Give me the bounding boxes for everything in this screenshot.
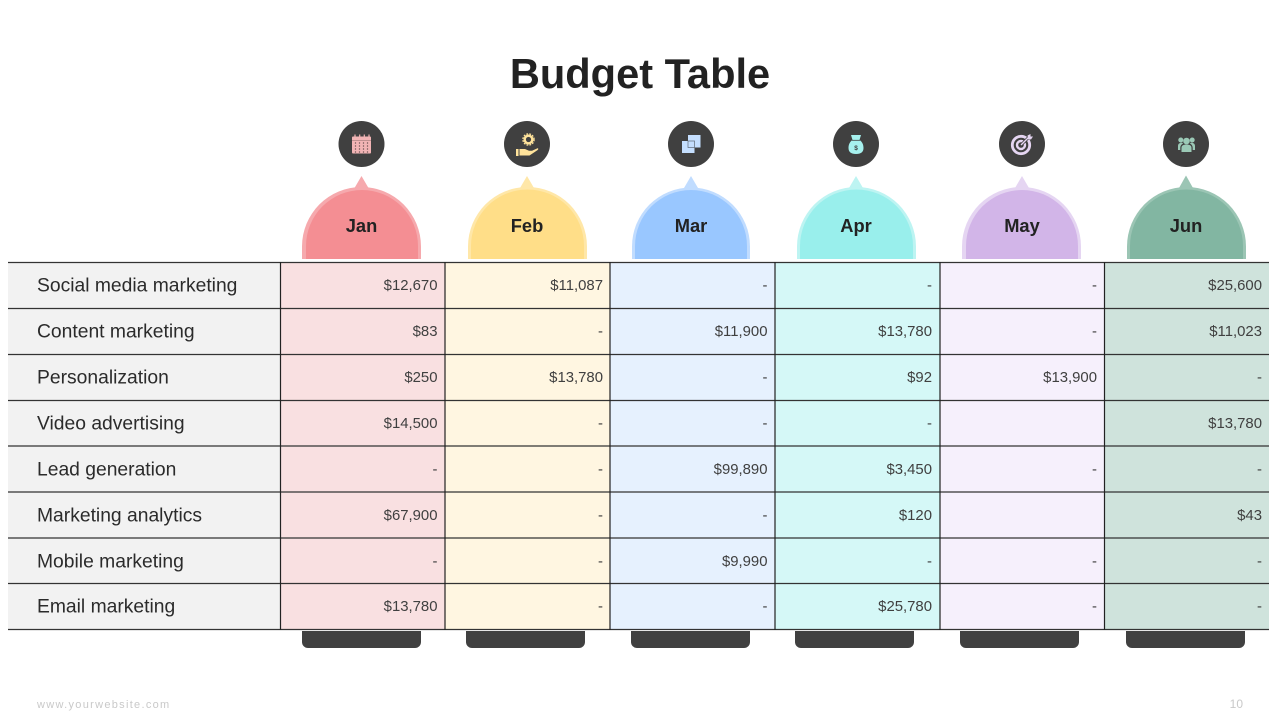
row: Marketing analytics bbox=[37, 506, 1262, 526]
icon: hand holding gear bbox=[504, 121, 550, 167]
row: Marketing analytics: $43 bbox=[1237, 508, 1262, 524]
row: Video advertising: - bbox=[598, 416, 603, 432]
icon: people group bbox=[1163, 121, 1209, 167]
row: Mobile marketing: - bbox=[598, 554, 603, 570]
row: Content marketing bbox=[37, 322, 1262, 342]
row: Personalization: Personalization bbox=[37, 368, 169, 388]
row: Mobile marketing: - bbox=[927, 554, 932, 570]
row: Email marketing: - bbox=[1257, 599, 1262, 615]
row: Social media marketing: $11,087 bbox=[550, 278, 603, 294]
budget table bbox=[8, 262, 1269, 630]
row: Email marketing: $13,780 bbox=[384, 599, 438, 615]
row: Personalization bbox=[37, 368, 1262, 388]
row: Lead generation: - bbox=[598, 462, 603, 478]
row: Lead generation: $99,890 bbox=[714, 462, 768, 478]
row: Content marketing: $11,900 bbox=[715, 324, 768, 340]
row: Email marketing: - bbox=[598, 599, 603, 615]
month dome: Apr bbox=[840, 215, 872, 236]
row: Marketing analytics: $67,900 bbox=[384, 508, 438, 524]
row: Video advertising: Video advertising bbox=[37, 414, 185, 434]
row: Lead generation: Lead generation bbox=[37, 460, 176, 480]
row: Social media marketing: $25,600 bbox=[1208, 278, 1262, 294]
row: Social media marketing: Social media marketing bbox=[37, 276, 237, 296]
row: Email marketing: - bbox=[1092, 599, 1097, 615]
row: Content marketing: $13,780 bbox=[878, 324, 932, 340]
row: Marketing analytics: $120 bbox=[899, 508, 932, 524]
title: Budget Table bbox=[510, 50, 770, 97]
column header: Feb bbox=[468, 121, 587, 259]
column header: Jan bbox=[302, 121, 421, 259]
row: Mobile marketing: Mobile marketing bbox=[37, 552, 184, 572]
row: Lead generation: - bbox=[1257, 462, 1262, 478]
month dome: Jun bbox=[1170, 215, 1202, 236]
row: Email marketing: Email marketing bbox=[37, 596, 175, 618]
column header: Mar bbox=[632, 121, 750, 259]
row: Lead generation: - bbox=[1092, 462, 1097, 478]
month dome: May bbox=[1004, 215, 1041, 236]
row: Video advertising: $13,780 bbox=[1208, 416, 1262, 432]
row: Mobile marketing bbox=[37, 552, 1262, 572]
footer: website: www.yourwebsite.com bbox=[36, 699, 171, 711]
row: Video advertising: - bbox=[763, 416, 768, 432]
row: Video advertising bbox=[37, 414, 1262, 434]
row: Personalization: $13,780 bbox=[549, 370, 603, 386]
column header: May bbox=[962, 121, 1081, 259]
row: Lead generation: $3,450 bbox=[886, 462, 932, 478]
footer: page number: 10 bbox=[1230, 697, 1243, 711]
row: Mobile marketing: - bbox=[1092, 554, 1097, 570]
bottom tabs bbox=[302, 631, 1245, 648]
month dome: Feb bbox=[511, 215, 543, 236]
row: Content marketing: Content marketing bbox=[37, 322, 195, 342]
row: Social media marketing bbox=[37, 276, 1262, 296]
row: Content marketing: - bbox=[598, 324, 603, 340]
icon: calendar bbox=[338, 121, 384, 167]
row: Email marketing: - bbox=[763, 599, 768, 615]
row: Email marketing bbox=[37, 596, 1262, 618]
row: Personalization: $250 bbox=[404, 370, 438, 386]
row: Content marketing: - bbox=[1092, 324, 1097, 340]
row: Lead generation: - bbox=[433, 462, 438, 478]
row: Mobile marketing: - bbox=[1257, 554, 1262, 570]
row: Personalization: - bbox=[763, 370, 768, 386]
row: Marketing analytics: Marketing analytics bbox=[37, 506, 202, 526]
row: Lead generation bbox=[37, 460, 1262, 480]
row: Video advertising: - bbox=[927, 416, 932, 432]
row: Social media marketing: $12,670 bbox=[384, 278, 438, 294]
row: Marketing analytics: - bbox=[598, 508, 603, 524]
column header: Jun bbox=[1127, 121, 1246, 259]
month dome: Mar bbox=[675, 215, 707, 236]
row: Social media marketing: - bbox=[927, 278, 932, 294]
row: Personalization: $92 bbox=[907, 370, 932, 386]
icon: overlapping squares bbox=[668, 121, 714, 167]
row: Mobile marketing: - bbox=[433, 554, 438, 570]
row: Social media marketing: - bbox=[1092, 278, 1097, 294]
icon: target bbox=[999, 121, 1045, 167]
icon: money bag: $ bbox=[854, 145, 858, 152]
row: Marketing analytics: - bbox=[763, 508, 768, 524]
row: Content marketing: $83 bbox=[413, 324, 438, 340]
row: Email marketing: $25,780 bbox=[878, 599, 932, 615]
row: Video advertising: $14,500 bbox=[384, 416, 438, 432]
row: Personalization: - bbox=[1257, 370, 1262, 386]
row: Personalization: $13,900 bbox=[1043, 370, 1097, 386]
column header: Apr bbox=[797, 121, 916, 259]
month dome: Jan bbox=[346, 215, 377, 236]
row: Content marketing: $11,023 bbox=[1209, 324, 1262, 340]
row: Mobile marketing: $9,990 bbox=[722, 554, 768, 570]
row: Social media marketing: - bbox=[763, 278, 768, 294]
